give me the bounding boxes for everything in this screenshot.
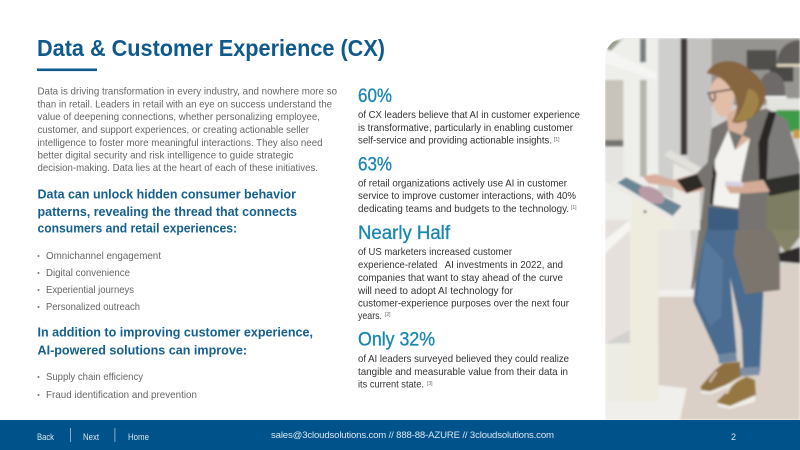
footer navigation: Next: [83, 432, 99, 442]
intro paragraph: Data is driving transformation in every industry, and nowhere more so: [38, 86, 337, 98]
stat: 63%: dedicating teams and budgets to the technology.: [358, 204, 569, 215]
stat: 63%: [1]: [571, 205, 577, 211]
stat: Only 32%: of AI leaders surveyed believed they could realize: [358, 354, 569, 365]
subheading: hidden consumer patterns: patterns, revealing the thread that connects: [38, 204, 297, 219]
bullet list: AI improvements: Fraud identification and prevention: [46, 390, 197, 401]
title: Data & Customer Experience (CX): [37, 35, 385, 61]
stat: 63%: of retail organizations actively use AI in customer: [358, 178, 568, 190]
stat: 63%: [358, 154, 577, 215]
bullet list: consumer experiences: Omnichannel engagement: [46, 251, 161, 262]
footer navigation: Back: [37, 432, 54, 442]
stat: Nearly Half: companies that want to stay ahead of the curve: [358, 273, 563, 284]
bullet list: consumer experiences: Experiential journeys: [46, 285, 134, 296]
stat: Nearly Half: customer-experience purposes over the next four: [358, 298, 570, 310]
stat: 63%: 63%: [358, 154, 392, 176]
subheading: hidden consumer patterns: consumers and retail experiences:: [38, 220, 237, 236]
bullet list: AI improvements: [38, 372, 197, 401]
stat: Nearly Half: will need to adopt AI technology for: [357, 286, 514, 297]
intro paragraph: [38, 86, 337, 174]
subheading: AI-powered solutions: [38, 324, 313, 358]
footer bar: [0, 420, 800, 450]
bullet list: consumer experiences: [38, 251, 161, 313]
stat: 60%: is transformative, particularly in enabling customer: [358, 123, 574, 134]
intro paragraph: better digital security and risk intelligence to guide strategic: [38, 150, 294, 162]
intro paragraph: customer, and support experiences, or creating actionable seller: [38, 125, 310, 136]
page number: 2: [731, 432, 736, 442]
footer navigation: [37, 428, 149, 442]
stat: Only 32%: [3]: [427, 381, 433, 387]
stat: 60%: [1]: [554, 137, 560, 143]
stat: Only 32%: [358, 330, 569, 390]
subheading: hidden consumer patterns: Data can unlock hidden consumer behavior: [38, 186, 296, 202]
intro paragraph: value of deepening connections, whether personalizing employee,: [38, 112, 320, 123]
subheading: AI-powered solutions: In addition to improving customer experience,: [38, 324, 313, 340]
intro paragraph: decision-making. Data lies at the heart of each of these initiatives.: [38, 163, 318, 174]
stat: 60%: 60%: [358, 86, 392, 107]
photo: woman using a retail kiosk: [605, 30, 800, 420]
stat: Nearly Half: [2]: [385, 312, 391, 318]
stat: Nearly Half: Nearly Half: [358, 223, 451, 244]
intro paragraph: than in retail. Leaders in retail with an eye on success understand the: [38, 100, 332, 110]
footer navigation: Home: [128, 432, 149, 442]
stat: 60%: self-service and providing actionable insights.: [358, 136, 552, 146]
stat: 63%: service to improve customer interactions, with 40%: [358, 191, 576, 202]
stat: Nearly Half: years.: [358, 311, 382, 322]
stat: Nearly Half: of US marketers increased customer: [358, 247, 513, 258]
intro paragraph: intelligence to foster more meaningful interactions. They also need: [38, 138, 323, 149]
title underline: [37, 68, 97, 71]
bullet list: consumer experiences: Personalized outreach: [46, 302, 140, 313]
subheading: AI-powered solutions: AI-powered solutions can improve:: [38, 342, 247, 358]
stat: Nearly Half: [357, 223, 570, 322]
subheading: hidden consumer patterns: [38, 186, 297, 236]
stat: Only 32%: its current state.: [358, 380, 424, 390]
stat: 60%: of CX leaders believe that AI in customer experience: [358, 110, 580, 121]
bullet list: AI improvements: Supply chain efficiency: [46, 372, 144, 383]
stat: Only 32%: tangible and measurable value from their data in: [358, 367, 568, 378]
bullet list: consumer experiences: Digital convenience: [46, 268, 130, 279]
stat: 60%: [358, 86, 580, 146]
stat: Nearly Half: experience-related AI investments in 2022, and: [358, 260, 563, 271]
stat: Only 32%: Only 32%: [358, 330, 435, 350]
footer contact line: sales@3cloudsolutions.com // 888-88-AZURE // 3cloudsolutions.com: [271, 430, 554, 441]
